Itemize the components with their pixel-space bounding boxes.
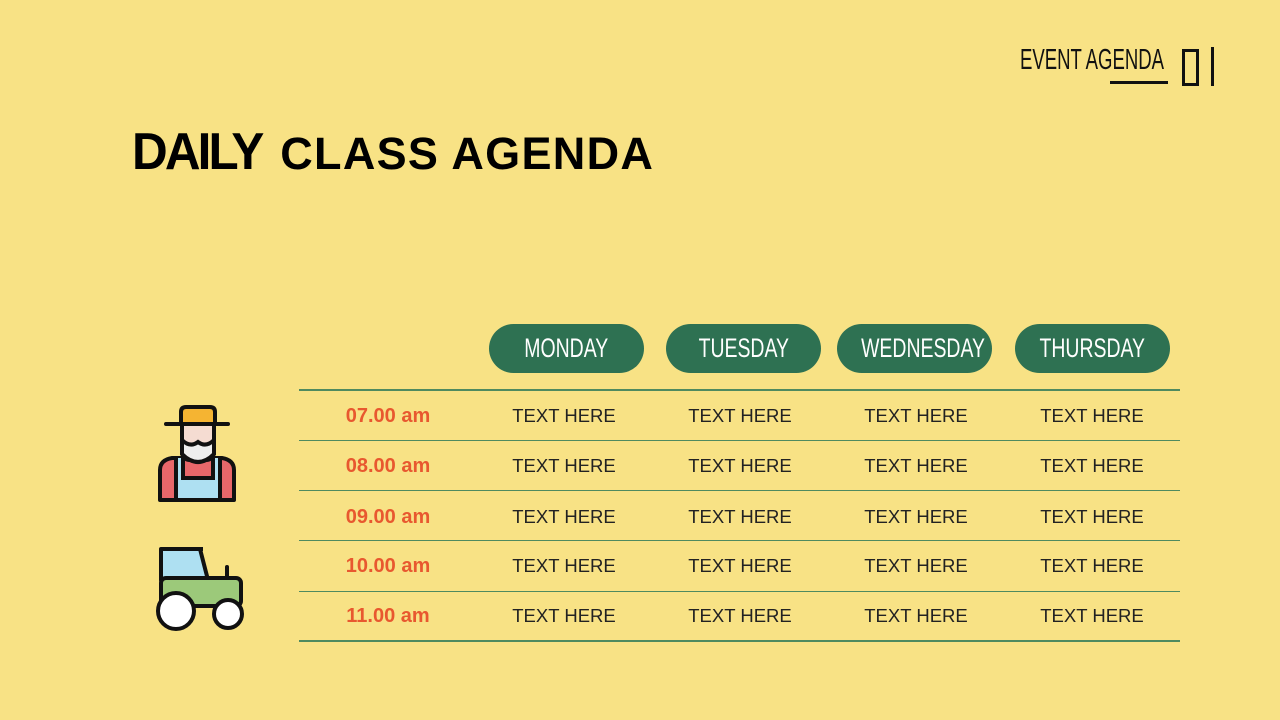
icon: tractor — [156, 547, 244, 631]
row 09.00: 09.00 am — [346, 506, 430, 528]
row 10.00 — [346, 555, 1144, 577]
row 07.00: TEXT HERE — [1040, 405, 1144, 426]
icon: farmer — [158, 405, 236, 502]
row 10.00: TEXT HERE — [688, 555, 792, 576]
row 07.00: 07.00 am — [346, 405, 430, 427]
title — [132, 123, 654, 181]
pill: monday: MONDAY — [525, 333, 608, 363]
row 09.00: TEXT HERE — [512, 506, 616, 527]
row 09.00: TEXT HERE — [1040, 506, 1144, 527]
row 09.00: TEXT HERE — [688, 506, 792, 527]
table — [346, 405, 1144, 627]
row 08.00: TEXT HERE — [864, 455, 968, 476]
pill: thursday: THURSDAY — [1040, 333, 1145, 363]
pill: thursday — [1015, 324, 1170, 373]
row 09.00 — [346, 506, 1144, 528]
row 10.00: 10.00 am — [346, 555, 430, 577]
pill: wednesday — [837, 324, 992, 373]
header label: event agenda 01 — [1020, 44, 1214, 86]
pill: tuesday: TUESDAY — [698, 333, 789, 363]
row 09.00: TEXT HERE — [864, 506, 968, 527]
row 08.00: TEXT HERE — [688, 455, 792, 476]
header label: event agenda 01: EVENT AGENDA — [1020, 44, 1164, 76]
title: DAILY — [132, 123, 261, 181]
row 07.00 — [346, 405, 1144, 427]
row 10.00: TEXT HERE — [1040, 555, 1144, 576]
pill: tuesday — [666, 324, 821, 373]
row 11.00: TEXT HERE — [1040, 605, 1144, 626]
row 10.00: TEXT HERE — [512, 555, 616, 576]
row 11.00: TEXT HERE — [512, 605, 616, 626]
row 11.00: TEXT HERE — [864, 605, 968, 626]
row 08.00 — [346, 455, 1144, 477]
row 11.00: TEXT HERE — [688, 605, 792, 626]
row 08.00: TEXT HERE — [1040, 455, 1144, 476]
row 08.00: 08.00 am — [346, 455, 430, 477]
row 07.00: TEXT HERE — [512, 405, 616, 426]
row 11.00: 11.00 am — [346, 605, 430, 627]
row 10.00: TEXT HERE — [864, 555, 968, 576]
pill: wednesday: WEDNESDAY — [861, 333, 985, 363]
pill: monday — [489, 324, 644, 373]
row 07.00: TEXT HERE — [864, 405, 968, 426]
row 08.00: TEXT HERE — [512, 455, 616, 476]
row 07.00: TEXT HERE — [688, 405, 792, 426]
title: CLASS AGENDA — [280, 128, 654, 179]
day headers — [489, 324, 1170, 373]
row 11.00 — [346, 605, 1144, 627]
